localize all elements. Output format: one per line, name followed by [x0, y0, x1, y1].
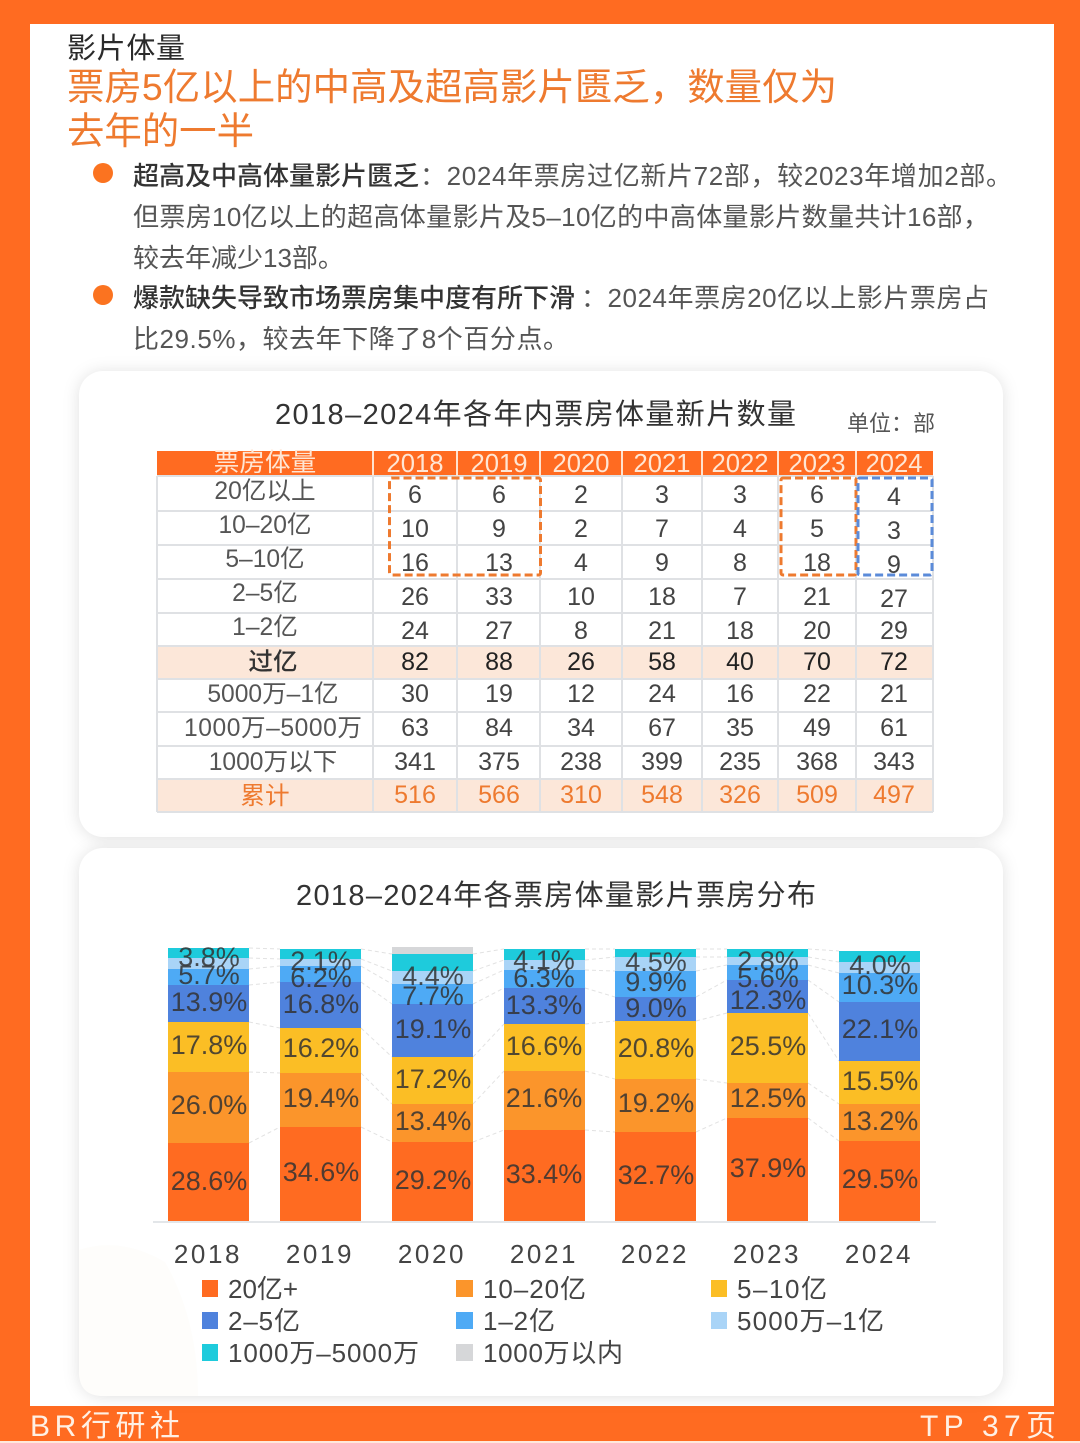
bar 2021 [504, 945, 585, 1221]
stacked bar chart [153, 942, 936, 1269]
x axis labels: 2020 [398, 1239, 466, 1269]
table values [394, 481, 915, 809]
legend: 5–10亿 [737, 1274, 827, 1304]
table values: 516 [394, 781, 436, 809]
table values: 566 [478, 781, 520, 809]
footer: page note: TP 37页 [920, 1410, 1056, 1443]
x axis labels: 2019 [286, 1239, 354, 1269]
table values: 19 [485, 680, 513, 708]
bullet 1 marker [93, 163, 113, 183]
bar 2023: 12.5% [730, 1083, 806, 1113]
chart title: 2018–2024年各票房体量影片票房分布 [296, 879, 816, 912]
highlight box: 2023 [781, 478, 856, 575]
bullet 1 text: ：2024年票房过亿新片72部，较2023年增加2部。 [420, 161, 1012, 191]
bullet 2 text: 爆款缺失导致市场票房集中度有所下滑 [133, 283, 575, 313]
x axis labels: 2024 [845, 1239, 913, 1269]
table values: 375 [478, 748, 520, 776]
legend: 1000万–5000万 [228, 1338, 419, 1368]
row labels [184, 477, 362, 810]
connector lines [249, 948, 839, 1143]
bar 2024: 29.5% [842, 1164, 918, 1194]
table values: 3 [887, 517, 901, 545]
x axis labels: 2023 [733, 1239, 801, 1269]
table values: 40 [726, 648, 754, 676]
bar 2022: 20.8% [618, 1033, 694, 1063]
table values: 70 [803, 648, 831, 676]
bar 2021: 6.3% [513, 963, 575, 993]
table values: 27 [880, 585, 908, 613]
table values: 18 [648, 583, 676, 611]
highlight box: 2024 [858, 478, 932, 575]
table values: 9 [655, 549, 669, 577]
bar 2022: 32.7% [618, 1160, 694, 1190]
row labels: 5–10亿 [225, 545, 305, 573]
table values: 20 [803, 617, 831, 645]
table values: 16 [401, 549, 429, 577]
bar 2023: 37.9% [730, 1153, 806, 1183]
table values: 3 [655, 481, 669, 509]
title [67, 66, 837, 152]
table values: 341 [394, 748, 436, 776]
row labels: 20亿以上 [214, 477, 316, 505]
bullet 1 text: 但票房10亿以上的超高体量影片及5–10亿的中高体量影片数量共计16部， [133, 202, 989, 232]
table header row: 2019 [471, 450, 527, 478]
panel: chart card [79, 848, 1003, 1396]
bar 2019: 16.8% [283, 989, 359, 1019]
bar 2019: 16.2% [283, 1033, 359, 1063]
table values: 88 [485, 648, 513, 676]
table values: 5 [810, 515, 824, 543]
table values: 10 [401, 515, 429, 543]
title: 票房5亿以上的中高及超高影片匮乏，数量仅为 [67, 66, 837, 108]
bar 2019 [280, 946, 361, 1221]
x axis labels [174, 1239, 913, 1269]
row labels: 1–2亿 [232, 613, 298, 641]
bar 2020: 19.1% [395, 1014, 471, 1044]
row labels: 2–5亿 [232, 579, 298, 607]
table header row: 2024 [866, 450, 922, 478]
table values: 8 [733, 549, 747, 577]
legend: 20亿+ [228, 1274, 298, 1304]
table values: 399 [641, 748, 683, 776]
table header row: 2018 [387, 450, 443, 478]
table header row [214, 448, 922, 478]
table values: 10 [567, 583, 595, 611]
bar 2021: 21.6% [506, 1083, 582, 1113]
table title: 2018–2024年各年内票房体量新片数量 [275, 398, 796, 431]
table values: 33 [485, 583, 513, 611]
x axis labels: 2018 [174, 1239, 242, 1269]
bar 2024 [839, 950, 920, 1221]
x axis labels: 2022 [621, 1239, 689, 1269]
bar 2022: 19.2% [618, 1088, 694, 1118]
table values: 497 [873, 781, 915, 809]
row labels: 1000万–5000万 [184, 715, 362, 742]
bar 2019: 6.2% [290, 963, 352, 993]
table values: 21 [880, 680, 908, 708]
table values: 49 [803, 714, 831, 742]
bar 2018: 5.7% [178, 960, 240, 990]
table values: 26 [401, 583, 429, 611]
bar 2020: 4.4% [402, 961, 464, 991]
bullet 1 text: 超高及中高体量影片匮乏 [133, 161, 419, 191]
bar 2022: 9.0% [625, 993, 687, 1023]
bullet 2 text [133, 283, 989, 354]
table values: 84 [485, 714, 513, 742]
table header row: 2020 [553, 450, 609, 478]
table values: 58 [648, 648, 676, 676]
bar 2019: 19.4% [283, 1083, 359, 1113]
table values: 26 [567, 648, 595, 676]
bullet 1 text [133, 161, 1012, 273]
title: 去年的一半 [67, 110, 254, 152]
table values: 3 [733, 481, 747, 509]
table values: 34 [567, 714, 595, 742]
x axis labels: 2021 [510, 1239, 578, 1269]
legend [202, 1274, 884, 1368]
bar 2020: 17.2% [395, 1064, 471, 1094]
bar 2018: 13.9% [171, 987, 247, 1017]
table values: 18 [726, 617, 754, 645]
table values: 235 [719, 748, 761, 776]
bar 2020 [392, 947, 473, 1221]
highlight box: 2018-2019 [390, 478, 540, 575]
table values: 326 [719, 781, 761, 809]
table values: 6 [408, 481, 422, 509]
footer: brand: BR行研社 [30, 1410, 180, 1443]
table values: 22 [803, 680, 831, 708]
bar 2024: 13.2% [842, 1106, 918, 1136]
table values: 7 [733, 583, 747, 611]
table values: 61 [880, 714, 908, 742]
bar 2022: 4.5% [625, 947, 687, 977]
legend: 1–2亿 [483, 1306, 555, 1336]
section label: 影片体量 [67, 32, 185, 65]
table values: 238 [560, 748, 602, 776]
table values: 16 [726, 680, 754, 708]
legend: 1000万以内 [483, 1338, 623, 1368]
bar 2023: 25.5% [730, 1031, 806, 1061]
bar 2024: 22.1% [842, 1014, 918, 1044]
table values: 24 [401, 617, 429, 645]
panel: table card [79, 371, 1003, 837]
legend: 5000万–1亿 [737, 1306, 884, 1336]
table values: 6 [810, 481, 824, 509]
table values: 82 [401, 648, 429, 676]
bar 2021: 16.6% [506, 1031, 582, 1061]
bar 2023: 2.8% [737, 946, 799, 976]
bar 2018: 28.6% [171, 1166, 247, 1196]
bullet 2 marker [93, 285, 113, 305]
bar 2019: 2.1% [290, 946, 352, 976]
table values: 9 [887, 551, 901, 579]
bar 2018 [168, 942, 249, 1221]
table header row: 2021 [634, 450, 690, 478]
table values: 13 [485, 549, 513, 577]
bar 2018: 17.8% [171, 1030, 247, 1060]
table values: 72 [880, 648, 908, 676]
unit note: 单位：部 [847, 411, 935, 436]
row labels: 10–20亿 [219, 511, 311, 539]
table values: 24 [648, 680, 676, 708]
table values: 12 [567, 680, 595, 708]
bar 2021: 4.1% [513, 945, 575, 975]
table values: 9 [492, 515, 506, 543]
table values: 509 [796, 781, 838, 809]
bar 2023: 5.6% [737, 963, 799, 993]
data table [157, 448, 933, 812]
legend: 2–5亿 [228, 1306, 300, 1336]
bar 2020: 7.7% [402, 981, 464, 1011]
legend: 10–20亿 [483, 1274, 586, 1304]
table values: 368 [796, 748, 838, 776]
table values: 67 [648, 714, 676, 742]
table values: 548 [641, 781, 683, 809]
table values: 2 [574, 481, 588, 509]
table values: 27 [485, 617, 513, 645]
bar 2024: 4.0% [849, 950, 911, 980]
table values: 30 [401, 680, 429, 708]
row labels: 1000万以下 [209, 749, 337, 776]
bar 2023: 12.3% [730, 985, 806, 1015]
bar 2019: 34.6% [283, 1157, 359, 1187]
table values: 4 [733, 515, 747, 543]
table values: 6 [492, 481, 506, 509]
table values: 343 [873, 748, 915, 776]
bar 2022 [615, 947, 696, 1221]
table values: 310 [560, 781, 602, 809]
bar 2020: 29.2% [395, 1165, 471, 1195]
bullet 2 text: 比29.5%，较去年下降了8个百分点。 [133, 324, 569, 354]
row labels: 累计 [240, 782, 290, 810]
table values: 21 [803, 583, 831, 611]
bar 2020: 13.4% [395, 1106, 471, 1136]
table values: 4 [574, 549, 588, 577]
table values: 63 [401, 714, 429, 742]
table header row: 票房体量 [214, 448, 316, 477]
row labels: 过亿 [248, 648, 298, 676]
bullet 1 text: 较去年减少13部。 [133, 243, 344, 273]
table values: 29 [880, 617, 908, 645]
bar 2022: 9.9% [625, 967, 687, 997]
table values: 7 [655, 515, 669, 543]
bullet 2 text: ：2024年票房20亿以上影片票房占 [581, 283, 989, 313]
bar 2018: 26.0% [171, 1090, 247, 1120]
table values: 4 [887, 483, 901, 511]
bar 2024: 15.5% [842, 1066, 918, 1096]
bar 2018: 3.8% [178, 942, 240, 972]
table values: 18 [803, 549, 831, 577]
bar 2021: 33.4% [506, 1159, 582, 1189]
bar 2023 [727, 946, 808, 1221]
table values: 8 [574, 617, 588, 645]
bar 2021: 13.3% [506, 990, 582, 1020]
row labels: 5000万–1亿 [207, 680, 339, 708]
table header row: 2022 [712, 450, 768, 478]
bar 2024: 10.3% [842, 970, 918, 1000]
table header row: 2023 [789, 450, 845, 478]
table values: 2 [574, 515, 588, 543]
bullet list [93, 161, 1012, 354]
table values: 21 [648, 617, 676, 645]
table values: 35 [726, 714, 754, 742]
